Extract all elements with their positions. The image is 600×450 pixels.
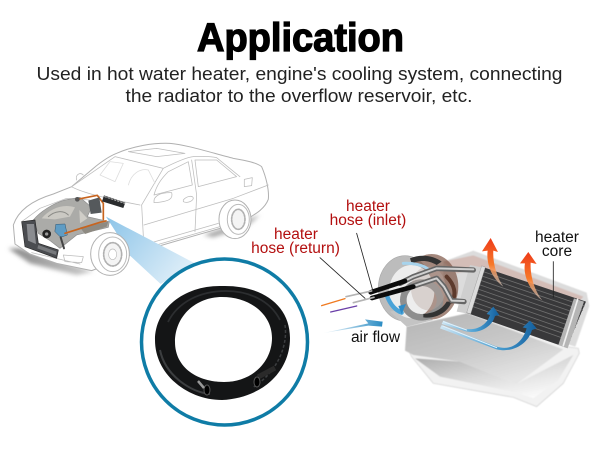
car illustration: [8, 143, 268, 284]
description text: the radiator to the overflow reservoir, etc.: [126, 86, 472, 106]
description text: [36, 64, 562, 106]
car details: [22, 148, 268, 264]
label: heater hose inlet: [330, 198, 406, 229]
engine: [33, 197, 109, 248]
label: heater hose return: [251, 226, 340, 257]
pipes: [400, 268, 473, 283]
black hoses: [371, 281, 413, 298]
flow arrows: [322, 299, 345, 306]
label: heater hose inlet: hose (inlet): [330, 212, 406, 229]
hose coil: [155, 286, 290, 400]
label: heater core: heater: [535, 229, 579, 246]
ground shadow: [8, 248, 93, 275]
blower fan: [378, 254, 458, 327]
housing: [405, 251, 589, 407]
fan: [42, 230, 51, 238]
label: heater hose return: hose (return): [251, 240, 340, 257]
red heat arrows: [482, 238, 503, 287]
description text: Used in hot water heater, engine's cooling system, connecting: [36, 64, 562, 84]
label: heater hose return: heater: [274, 226, 318, 243]
leader lines: [320, 233, 373, 298]
pump: [55, 224, 67, 237]
front wheel: [91, 233, 129, 275]
blue air arrows: [442, 307, 499, 332]
car body: [13, 143, 268, 271]
orange hoses: [65, 195, 106, 233]
heater unit: [88, 197, 102, 214]
title: Application: [197, 16, 404, 60]
label: heater core: [535, 229, 579, 260]
label: heater core: core: [542, 243, 572, 260]
label: heater hose inlet: heater: [346, 198, 390, 215]
product circle: [142, 259, 308, 425]
radiator: [22, 220, 58, 258]
core: [457, 265, 586, 348]
label: air flow: air flow: [351, 329, 401, 346]
light beam: [106, 217, 195, 284]
heater core diagram: [320, 233, 589, 407]
rear wheel: [219, 200, 251, 239]
